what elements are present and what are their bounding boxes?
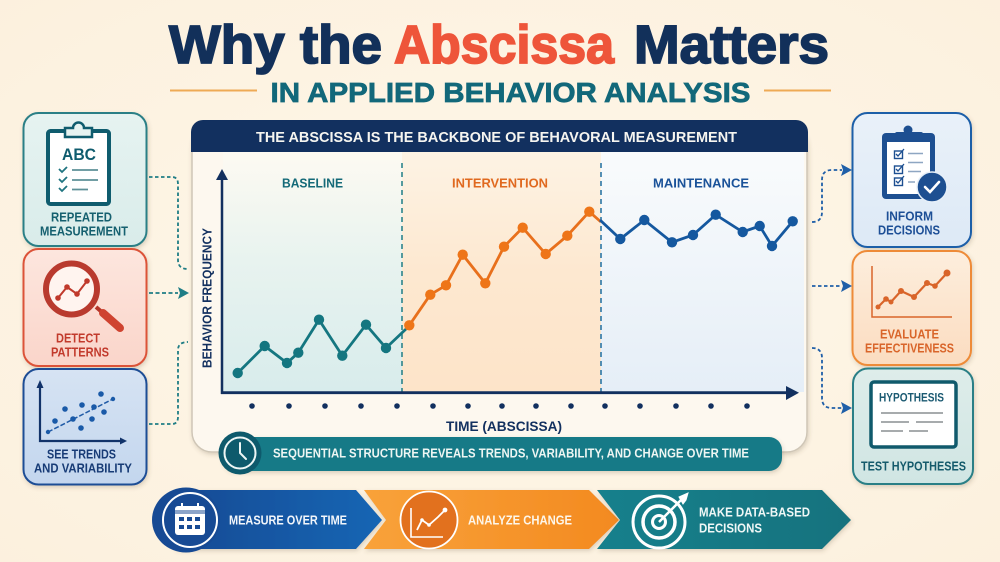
label (878, 208, 940, 238)
label: DECISIONS (878, 222, 940, 238)
x axis (221, 386, 799, 400)
step label: MAKE DATA-BASED (699, 506, 810, 520)
icon: calendar (152, 488, 220, 552)
card: inform decisions (852, 113, 971, 247)
card: test hypotheses (853, 368, 973, 484)
intervention data series (404, 206, 601, 330)
icon: line chart (400, 492, 458, 548)
title (169, 15, 829, 75)
label: DETECT (56, 330, 100, 346)
x axis label: TIME (ABSCISSA) (446, 419, 562, 434)
icon: magnifier (46, 264, 120, 328)
icon: clock (218, 432, 262, 474)
arrow: chart to inform decisions (812, 164, 852, 222)
label: INFORM (886, 208, 933, 224)
title: Matters (634, 15, 829, 75)
arrow: repeated measurement to chart (149, 177, 188, 269)
phase label: baseline: BASELINE (282, 176, 343, 190)
phase label: intervention: INTERVENTION (452, 176, 548, 190)
label (51, 330, 109, 360)
phase region: intervention (402, 152, 601, 392)
phase region: maintenance (601, 152, 804, 392)
label (40, 210, 128, 238)
phase divider: intervention to maintenance (600, 163, 602, 392)
title: Why the (169, 15, 382, 75)
phase label: maintenance: MAINTENANCE (653, 176, 749, 190)
baseline data series (232, 314, 406, 378)
y axis label: BEHAVIOR FREQUENCY (200, 228, 214, 368)
card: repeated measurement (24, 113, 146, 246)
y axis (216, 169, 228, 394)
process step: make data-based decisions (597, 490, 851, 549)
title: Abscissa (394, 15, 615, 75)
step label: MEASURE OVER TIME (229, 514, 347, 528)
phase region: baseline (223, 152, 402, 392)
banner: sequential structure (218, 432, 782, 474)
step label (699, 506, 810, 536)
card: see trends and variability (24, 369, 146, 484)
label: REPEATED (51, 210, 112, 224)
panel: main chart (191, 120, 808, 452)
subtitle: IN APPLIED BEHAVIOR ANALYSIS (270, 77, 750, 108)
time tick dots (249, 403, 750, 409)
card: detect patterns (24, 249, 146, 366)
process step: measure over time (152, 488, 382, 552)
icon: clipboard ABC: ABC (62, 146, 96, 164)
icon: scatter plot (36, 380, 127, 444)
icon: checklist clipboard (882, 126, 947, 202)
label: EFFECTIVENESS (865, 340, 954, 356)
panel header (191, 120, 808, 152)
arrow: chart to evaluate effectiveness (812, 280, 852, 292)
arrow: trends to chart (149, 342, 188, 424)
icon: hypothesis sheet: HYPOTHESIS (879, 390, 944, 404)
banner text: SEQUENTIAL STRUCTURE REVEALS TRENDS, VARIABILITY, AND CHANGE OVER TIME (273, 446, 749, 460)
step label: DECISIONS (699, 522, 762, 536)
label: SEE TRENDS (47, 446, 116, 462)
label (34, 446, 132, 476)
label: EVALUATE (880, 326, 939, 342)
label: AND VARIABILITY (34, 460, 132, 476)
process step: analyze change (364, 490, 619, 549)
icon: target (633, 493, 688, 548)
panel header: THE ABSCISSA IS THE BACKBONE OF BEHAVORAL MEASUREMENT (256, 130, 737, 146)
phase divider: baseline to intervention (401, 163, 403, 392)
card: evaluate effectiveness (852, 251, 971, 365)
step label: ANALYZE CHANGE (468, 514, 572, 528)
arrow: chart to test hypotheses (812, 348, 852, 414)
icon: rising line chart (872, 266, 952, 317)
label: MEASUREMENT (40, 224, 128, 238)
label: TEST HYPOTHESES (861, 458, 966, 474)
maintenance data series (600, 210, 798, 251)
label: PATTERNS (51, 344, 109, 360)
arrow: detect patterns to chart (149, 287, 189, 299)
label (865, 326, 954, 356)
